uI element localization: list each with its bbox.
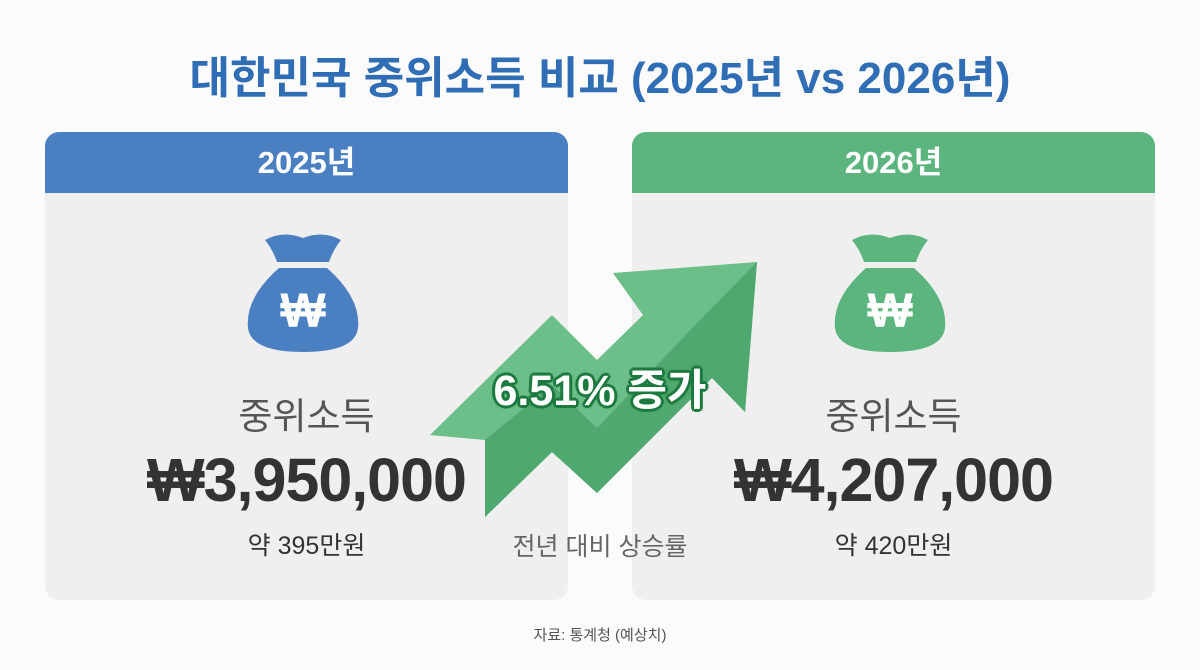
panel: 2026 [632, 132, 1155, 600]
header 2026 [632, 132, 1155, 193]
panel: 2025 [45, 132, 568, 600]
label: 중위소득 [825, 396, 962, 437]
amount: ₩4,207,000 [734, 446, 1053, 514]
icon: money bag green [834, 234, 946, 352]
header 2025 [45, 132, 568, 193]
header 2026: 2026년 [845, 145, 942, 180]
icon: money bag blue: ₩ [280, 285, 326, 338]
caption: yoy: 전년 대비 상승률 [513, 533, 687, 561]
icon: money bag blue [248, 234, 358, 352]
amount: ₩3,950,000 [147, 446, 466, 514]
title: 대한민국 중위소득 비교 (2025년 vs 2026년) [190, 54, 1010, 103]
label: 중위소득 [238, 396, 375, 437]
icon: money bag green: ₩ [867, 285, 913, 338]
source: 자료: 통계청 (예상치) [534, 627, 666, 644]
sub amount: 약 420만원 [835, 532, 952, 560]
header 2025: 2025년 [258, 145, 355, 180]
sub amount: 약 395만원 [248, 532, 365, 560]
callout: increase: 6.51% 증가 [494, 367, 706, 415]
